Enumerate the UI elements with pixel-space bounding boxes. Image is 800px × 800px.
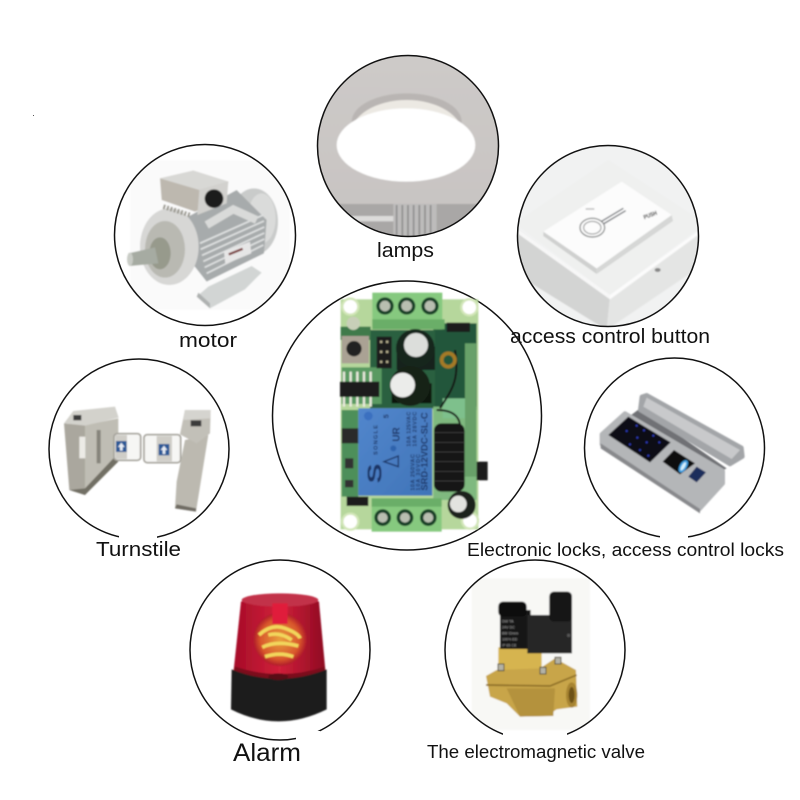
label background: turnstile xyxy=(119,536,157,542)
panel: access control button xyxy=(515,140,705,330)
panel: electromagnetic valve xyxy=(427,560,645,762)
icon: push button xyxy=(518,146,698,326)
icon: turnstile gates xyxy=(64,407,211,512)
icon: wireless relay board xyxy=(340,293,488,532)
panel: electronic lock xyxy=(467,358,784,560)
icon: solenoid valve: 100% ED xyxy=(502,638,518,642)
label: turnstile: Turnstile xyxy=(96,539,181,561)
icon: solenoid valve xyxy=(472,578,590,730)
panel: alarm xyxy=(190,560,370,767)
icon: push button: PUSH xyxy=(643,211,658,221)
label background: valve xyxy=(503,733,567,742)
terminal block: top xyxy=(372,293,445,329)
icon: red beacon xyxy=(231,593,327,721)
icon: fingerprint lock xyxy=(601,395,743,513)
label: locks: Electronic locks, access control locks xyxy=(467,540,784,560)
relay: 10A 125VAC xyxy=(407,412,413,447)
circle outline: button xyxy=(518,146,698,326)
relay: 10A 30VDC xyxy=(416,454,422,491)
relay: 10A 28VDC xyxy=(413,412,419,447)
panel: motor xyxy=(114,144,296,352)
label: access control button: access control button xyxy=(510,326,710,348)
capacitors xyxy=(397,347,435,370)
circle outline: turnstile xyxy=(49,359,229,539)
circle outline: center xyxy=(272,281,542,550)
icon: solenoid valve: 24V DC xyxy=(502,626,515,630)
panel: relay module xyxy=(272,281,542,550)
circle outline: motor xyxy=(114,144,296,326)
circle outline: alarm xyxy=(190,560,370,740)
IC chips xyxy=(340,382,379,397)
label: alarm: Alarm xyxy=(233,739,301,767)
icon: ceiling lamp xyxy=(318,56,498,236)
background speck xyxy=(33,115,34,116)
icon: solenoid valve: 8W IDmm xyxy=(502,632,518,636)
icon: solenoid valve: IP 65 CE xyxy=(502,644,517,648)
tact button xyxy=(342,336,369,363)
circle outline: lock xyxy=(584,358,764,538)
label background: alarm xyxy=(296,731,320,740)
label: motor: motor xyxy=(179,330,237,352)
relay: UR xyxy=(391,427,402,442)
label: valve: The electromagnetic valve xyxy=(427,742,645,762)
terminal block: bottom xyxy=(372,498,442,532)
icon: electric motor xyxy=(126,170,279,309)
circle outline: lamps xyxy=(318,56,498,236)
relay: 5 xyxy=(382,414,391,418)
relay: 10A 250VAC xyxy=(410,454,416,491)
receiver module xyxy=(465,343,476,477)
relay xyxy=(358,408,432,496)
circle outline: valve xyxy=(445,560,625,740)
relay: S xyxy=(365,463,387,483)
icon: solenoid valve: DW TA xyxy=(502,620,514,624)
relay: SRD-12VDC-SL-C xyxy=(420,412,430,491)
corner holes xyxy=(342,299,478,530)
panel: lamps xyxy=(315,50,505,262)
antenna coil xyxy=(434,350,465,492)
panel: turnstile xyxy=(49,359,229,561)
header pins xyxy=(377,337,392,368)
label: lamps: lamps xyxy=(377,240,434,262)
relay: SONGLE xyxy=(373,425,379,455)
label background: lock xyxy=(660,535,688,542)
